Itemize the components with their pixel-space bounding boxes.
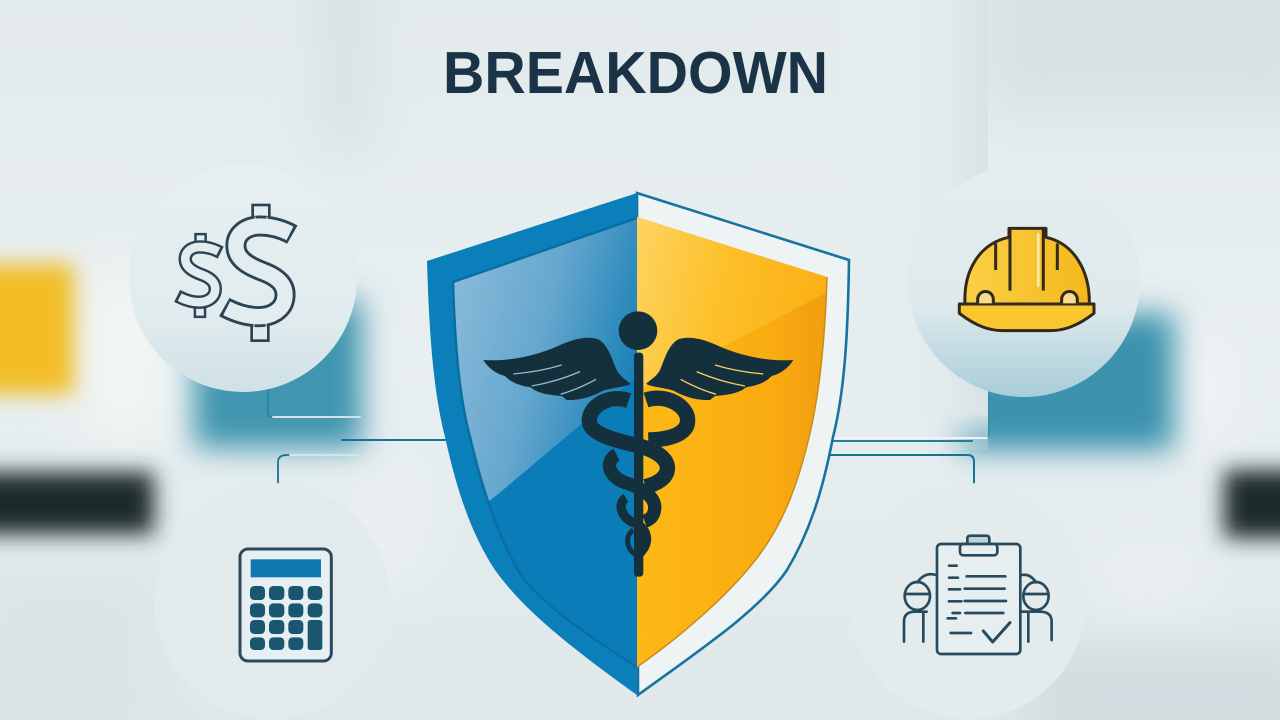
icon: dollar signs (177, 205, 292, 341)
orb (619, 311, 657, 350)
large dollar icon (224, 205, 292, 341)
shield left panel (454, 219, 637, 501)
circle: funding top left (129, 164, 357, 392)
connector lines: left (268, 388, 445, 484)
shield right panel (637, 210, 832, 680)
left wing (483, 338, 631, 400)
circle: calculator bottom left (154, 483, 390, 719)
icon: clipboard with workers (904, 536, 1052, 654)
caduceus (483, 311, 793, 577)
icon: calculator (240, 549, 331, 661)
snakes (589, 398, 688, 555)
icon: hard hat (959, 228, 1094, 331)
connector lines: right (830, 395, 989, 484)
circle: hard hat top right (908, 165, 1140, 397)
shield left outer band (427, 193, 637, 695)
shield right outer band (637, 193, 849, 695)
staff (634, 353, 643, 577)
circle: checklist bottom right (850, 483, 1086, 719)
title: BREAKDOWN (443, 40, 828, 106)
right wing (646, 338, 793, 400)
small dollar icon (177, 234, 221, 317)
shield (427, 193, 849, 695)
